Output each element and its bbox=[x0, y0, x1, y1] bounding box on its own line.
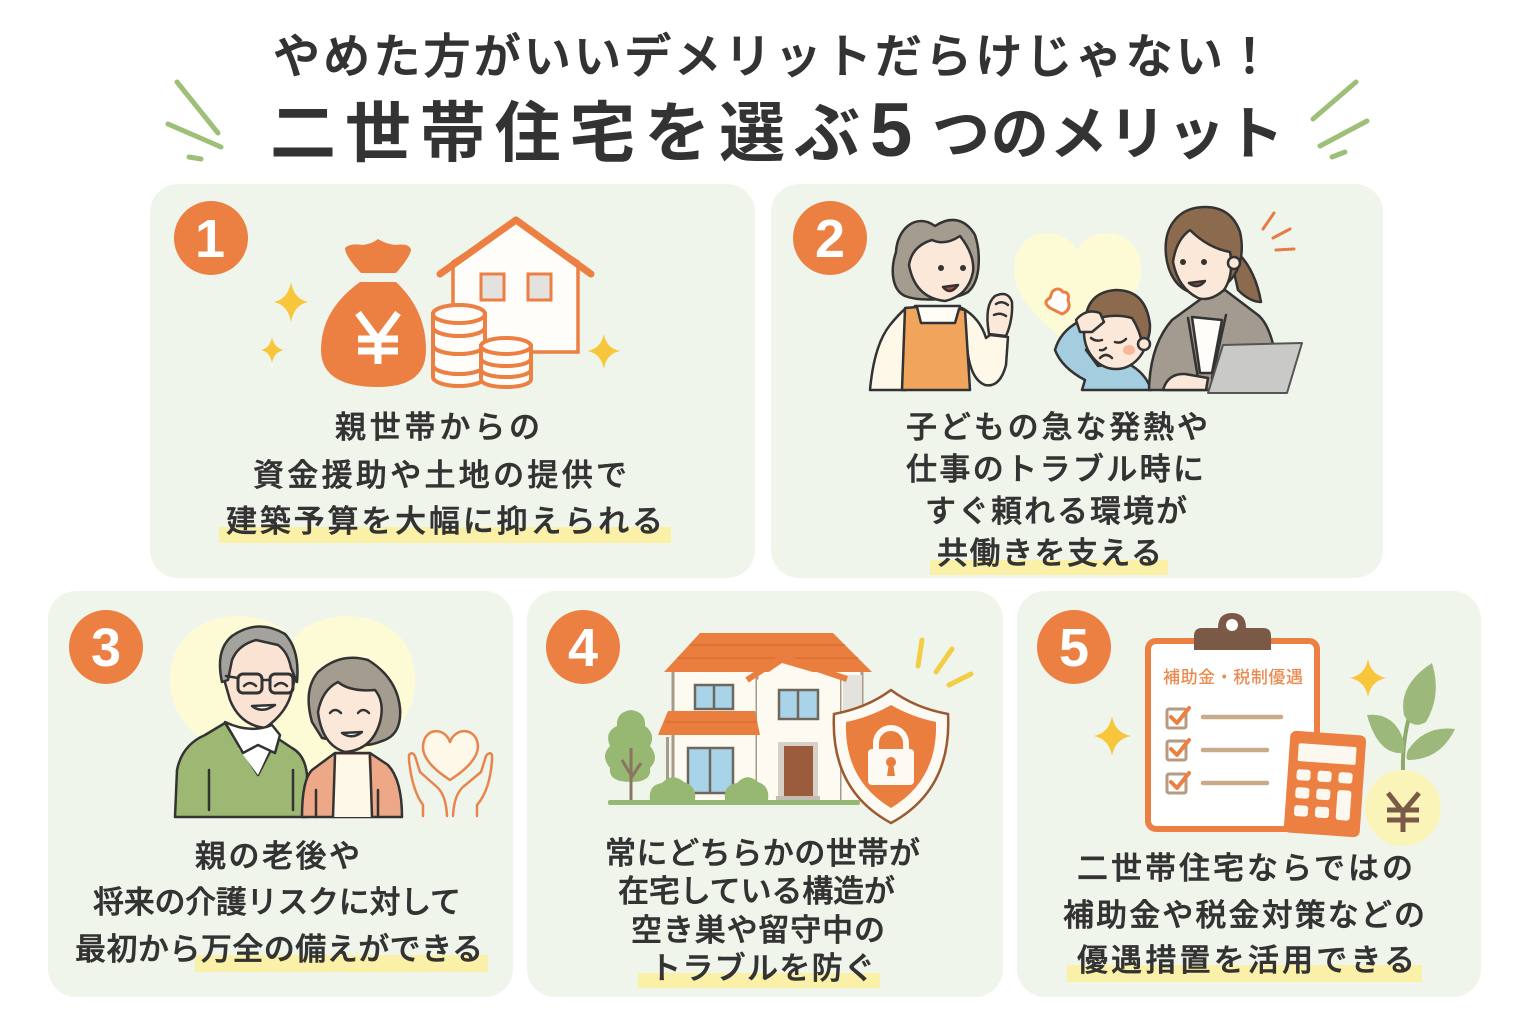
icon: house bbox=[440, 220, 591, 352]
icon: sparkles bbox=[261, 282, 620, 369]
illustration: ground bbox=[608, 800, 860, 805]
illustration: elderly woman bbox=[302, 658, 402, 817]
panel text: 補助金や税金対策などの bbox=[1063, 898, 1425, 933]
panel 5: subsidies and tax bbox=[1017, 591, 1481, 997]
panel text: 子どもの急な発熱や bbox=[906, 410, 1208, 445]
icon: emphasis rays bbox=[1263, 213, 1294, 250]
panel text: 二世帯住宅ならではの bbox=[1077, 851, 1413, 886]
number badge 3 bbox=[69, 610, 143, 684]
panel text: 仕事のトラブル時に bbox=[906, 452, 1204, 487]
number badge 5 bbox=[1037, 610, 1111, 684]
number badge 2 bbox=[793, 201, 867, 275]
panel text: トラブルを防ぐ bbox=[650, 951, 875, 986]
number badge 4 bbox=[546, 610, 620, 684]
illustration: tree bbox=[605, 710, 655, 800]
icon: coins bbox=[433, 305, 531, 387]
panel text: 在宅している構造が bbox=[618, 874, 895, 909]
title accent left bbox=[168, 82, 221, 159]
panel text: 共働きを支える bbox=[937, 536, 1162, 571]
panel text: 最初から万全の備えができる bbox=[75, 932, 483, 967]
panel text bbox=[75, 839, 483, 967]
panel 1: financial support bbox=[150, 184, 755, 578]
highlight bbox=[638, 973, 880, 988]
panel text: 常にどちらかの世帯が bbox=[605, 836, 920, 871]
number badge 5: 5 bbox=[1059, 618, 1089, 678]
number badge 3: 3 bbox=[91, 618, 121, 678]
highlight bbox=[219, 527, 671, 543]
panel text bbox=[605, 836, 920, 986]
panel text: すぐ頼れる環境が bbox=[925, 494, 1187, 529]
illustration: child bbox=[1055, 290, 1151, 390]
illustration: grandmother bbox=[870, 220, 1012, 390]
panel 2: working couples support bbox=[771, 184, 1383, 578]
number badge 1 bbox=[174, 201, 248, 275]
panel text bbox=[226, 410, 663, 539]
number badge 1: 1 bbox=[195, 209, 225, 269]
title accent right bbox=[1313, 82, 1367, 157]
title line 2: 二世帯住宅を選ぶ bbox=[270, 96, 860, 170]
panel text: 親の老後や bbox=[195, 839, 360, 874]
illustration: house bbox=[658, 633, 872, 802]
icon: clipboard: 補助金・税制優遇 bbox=[1163, 668, 1303, 687]
icon: yellow heart bbox=[170, 616, 415, 770]
illustration: elderly man bbox=[175, 626, 307, 817]
icon: clipboard bbox=[1148, 613, 1317, 829]
panel text: 将来の介護リスクに対して bbox=[93, 885, 461, 920]
title line 2: つのメリット bbox=[932, 102, 1284, 167]
title line 2 bbox=[270, 88, 1284, 173]
illustration: puff of fever bbox=[1046, 289, 1069, 314]
icon: yellow heart bbox=[1014, 233, 1141, 352]
number badge 2: 2 bbox=[815, 209, 845, 269]
panel 4: home security bbox=[527, 591, 1003, 997]
illustration: working mother bbox=[1149, 207, 1279, 390]
title line 2: 5 bbox=[870, 88, 912, 173]
highlight bbox=[1067, 965, 1422, 982]
icon: yellow rays bbox=[918, 640, 971, 685]
panel text bbox=[1063, 851, 1425, 978]
illustration: shrubs bbox=[650, 777, 768, 800]
panel text: 優遇措置を活用できる bbox=[1077, 943, 1415, 978]
highlight bbox=[930, 560, 1168, 575]
highlight bbox=[195, 955, 488, 972]
number badge 4: 4 bbox=[568, 618, 598, 678]
title line 1: やめた方がいいデメリットだらけじゃない！ bbox=[273, 30, 1273, 83]
icon: calculator bbox=[1284, 730, 1366, 838]
panel text: 親世帯からの bbox=[335, 410, 540, 445]
panel text: 資金援助や土地の提供で bbox=[253, 458, 627, 493]
panel 3: elderly care bbox=[48, 591, 513, 997]
panel text: 建築予算を大幅に抑えられる bbox=[226, 504, 663, 539]
icon: hands with heart bbox=[409, 731, 492, 816]
icon: sparkles bbox=[1094, 659, 1386, 756]
icon: plant bbox=[1367, 663, 1455, 770]
panel text: 空き巣や留守中の bbox=[631, 913, 885, 948]
icon: shield with lock bbox=[834, 690, 948, 823]
icon: laptop bbox=[1208, 343, 1302, 393]
icon: yen coin bbox=[1365, 770, 1441, 846]
icon: money bag bbox=[321, 239, 426, 387]
panel text bbox=[906, 410, 1208, 571]
